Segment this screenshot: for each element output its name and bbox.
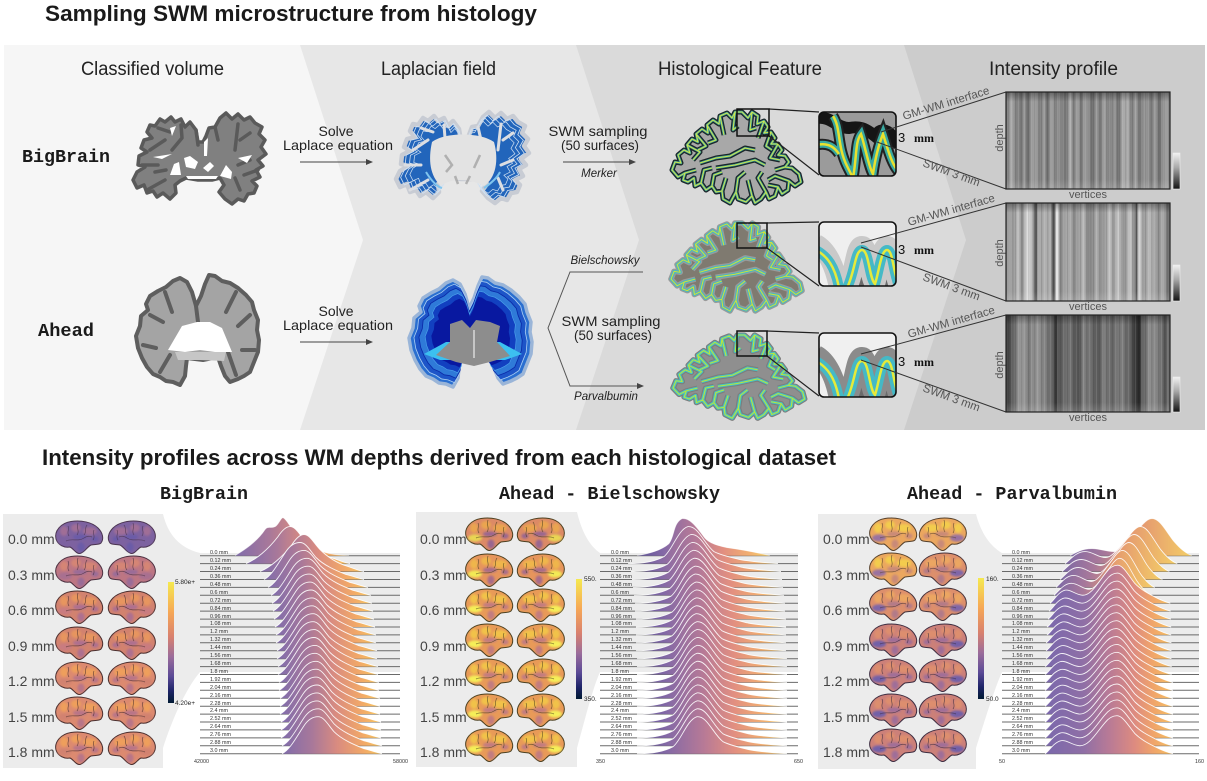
inset zoom: BigBrain <box>737 109 899 178</box>
ridge row labels: 0.12 mm <box>1012 558 1033 564</box>
ridge row labels: 1.2 mm <box>611 629 629 635</box>
ridge row labels: 1.56 mm <box>210 653 231 659</box>
ridge row labels: 1.56 mm <box>1012 653 1033 659</box>
depth labels: 0.9 mm <box>8 638 55 654</box>
label: SWM 3 mm 1: SWM 3 mm <box>921 158 981 189</box>
ridge row labels: 0.0 mm <box>611 550 629 556</box>
stage band: classified volume <box>4 45 1205 430</box>
label: 3 mm (bottom) <box>898 354 934 369</box>
depth labels <box>420 531 467 760</box>
cortical surface maps <box>466 518 564 762</box>
ridge row labels: 0.24 mm <box>1012 566 1033 572</box>
ridge row labels: 3.0 mm <box>210 748 228 754</box>
label: 3 mm (top): 3 <box>898 130 905 145</box>
ridge row labels: 2.64 mm <box>611 724 632 730</box>
panel: sampling workflow <box>4 45 1205 430</box>
label: 3 mm (top): mm <box>914 131 934 145</box>
intensity profile: Bielschowsky <box>1006 203 1170 301</box>
label: GM-WM interface 1: GM-WM interface <box>901 85 991 123</box>
label: solve laplace (top): Solve <box>318 123 354 139</box>
ridge row labels: 0.72 mm <box>210 598 231 604</box>
inset zoom: Bielschowsky <box>737 222 899 288</box>
label: SWM 3 mm 3: SWM 3 mm <box>921 383 981 414</box>
x axis labels: 58000 <box>393 759 408 765</box>
arrows: branching to Bielschowsky and Parvalbumin <box>548 272 643 386</box>
label: SWM sampling top <box>548 123 648 153</box>
axis label: depth 1: depth <box>994 124 1006 152</box>
ridge row labels: 1.68 mm <box>210 661 231 667</box>
ridge row labels: 2.64 mm <box>210 724 231 730</box>
ridge row labels: 0.12 mm <box>210 558 231 564</box>
ridge row labels: 1.56 mm <box>611 653 632 659</box>
ridge row labels: 0.36 mm <box>1012 574 1033 580</box>
depth labels <box>8 531 55 760</box>
ridge row labels: 1.32 mm <box>611 637 632 643</box>
axis label: vertices 2: vertices <box>1069 301 1107 313</box>
grey backdrop <box>818 514 1199 769</box>
ridge row labels: 1.08 mm <box>210 621 231 627</box>
depth labels: 1.5 mm <box>8 709 55 725</box>
colorbar: 50.0 <box>986 696 999 703</box>
depth labels <box>823 531 870 760</box>
label: solve laplace (bottom): Laplace equation <box>283 317 393 333</box>
depth labels: 0.3 mm <box>823 567 870 583</box>
colorbar: 350. <box>584 696 597 703</box>
x axis labels: 160 <box>1195 759 1204 765</box>
label: Bielschowsky: Bielschowsky <box>570 255 641 267</box>
ridge row labels: 1.92 mm <box>210 677 231 683</box>
ridge row labels <box>210 550 231 754</box>
histology brain: Bielschowsky <box>671 223 802 311</box>
depth labels: 1.5 mm <box>823 709 870 725</box>
label: 3 mm (bottom): mm <box>914 355 934 369</box>
connector lines: profile 1 <box>877 92 1006 189</box>
panel: BigBrain depth profiles <box>3 484 408 768</box>
ridge row labels: 1.2 mm <box>1012 629 1030 635</box>
connector lines: profile 2 <box>861 203 1006 301</box>
ridge row labels: 0.24 mm <box>210 566 231 572</box>
label: 3 mm (middle): mm <box>914 243 934 257</box>
depth labels: 0.6 mm <box>823 602 870 618</box>
label: Parvalbumin: Parvalbumin <box>574 391 638 403</box>
ridge row labels: 0.24 mm <box>611 566 632 572</box>
heading: classified volume: Classified volume <box>81 59 224 80</box>
label: SWM sampling top: SWM sampling <box>548 123 648 139</box>
ridge row labels: 2.28 mm <box>1012 701 1033 707</box>
ridge row labels: 2.4 mm <box>611 708 629 714</box>
ridge row labels: 0.48 mm <box>1012 582 1033 588</box>
ridge row labels: 0.0 mm <box>1012 550 1030 556</box>
depth labels: 0.0 mm <box>420 531 467 547</box>
stage band: histological feature <box>576 45 1205 430</box>
ridge row labels: 1.44 mm <box>611 645 632 651</box>
ridge row labels: 1.8 mm <box>210 669 228 675</box>
intensity profile: Parvalbumin <box>1006 315 1170 412</box>
row label: BigBrain: BigBrain <box>22 147 110 168</box>
ridge row labels: 2.52 mm <box>1012 716 1033 722</box>
ridge row labels: 2.88 mm <box>611 740 632 746</box>
depth labels: 0.3 mm <box>8 567 55 583</box>
ridge row labels: 0.48 mm <box>611 582 632 588</box>
x axis labels <box>194 759 408 765</box>
label: 3 mm (top) <box>898 130 934 145</box>
ridge row labels: 2.16 mm <box>210 693 231 699</box>
ridge row labels: 2.52 mm <box>611 716 632 722</box>
stage band: laplacian field <box>300 45 1205 430</box>
label: solve laplace (bottom): Solve <box>318 303 354 319</box>
ridge row labels: 2.04 mm <box>1012 685 1033 691</box>
ridge row labels <box>1012 550 1033 754</box>
section title: Intensity profiles across WM depths derived from each histological dataset <box>42 445 837 470</box>
ridge row labels: 0.84 mm <box>611 606 632 612</box>
depth labels: 0.9 mm <box>823 638 870 654</box>
ridge row labels: 1.92 mm <box>1012 677 1033 683</box>
axis label: vertices 1: vertices <box>1069 189 1107 201</box>
colorbar: 550. <box>584 576 597 583</box>
ridge plot <box>600 519 798 754</box>
ridge row labels: 0.84 mm <box>1012 606 1033 612</box>
histology brain: Parvalbumin <box>673 335 805 418</box>
label: GM-WM interface 3: GM-WM interface <box>907 305 996 341</box>
axis label: depth 3: depth <box>994 351 1006 379</box>
main title: Sampling SWM microstructure from histology <box>45 1 538 26</box>
depth labels: 0.3 mm <box>420 567 467 583</box>
brain: Ahead laplacian field <box>409 277 532 387</box>
axis label: depth 2: depth <box>994 239 1006 267</box>
brain: BigBrain classified volume <box>133 113 266 204</box>
ridge row labels: 1.08 mm <box>1012 621 1033 627</box>
brain: BigBrain laplacian field <box>396 112 529 203</box>
connector lines: profile 3 <box>861 315 1006 412</box>
depth labels: 1.8 mm <box>823 744 870 760</box>
ridge row labels: 0.6 mm <box>611 590 629 596</box>
ridge row labels: 1.32 mm <box>210 637 231 643</box>
depth labels: 0.6 mm <box>420 602 467 618</box>
brain: Ahead classified volume <box>136 275 259 385</box>
ridge row labels: 0.96 mm <box>210 614 231 620</box>
arrow: SWM sampling top <box>563 161 635 163</box>
ridge row labels: 0.96 mm <box>611 614 632 620</box>
ridge row labels: 0.6 mm <box>210 590 228 596</box>
ridge row labels: 2.04 mm <box>611 685 632 691</box>
arrow: solve (top) <box>300 161 372 163</box>
x axis labels: 350 <box>596 759 605 765</box>
ridge row labels: 0.0 mm <box>210 550 228 556</box>
ridge row labels: 1.92 mm <box>611 677 632 683</box>
ridge row labels: 2.28 mm <box>611 701 632 707</box>
ridge row labels: 0.72 mm <box>1012 598 1033 604</box>
grey backdrop <box>3 514 400 768</box>
colorbar: profile 1 <box>1173 153 1180 189</box>
colorbar <box>168 579 195 707</box>
ridge row labels: 0.72 mm <box>611 598 632 604</box>
depth labels: 0.0 mm <box>823 531 870 547</box>
ridge row labels: 3.0 mm <box>611 748 629 754</box>
depth labels: 1.8 mm <box>8 744 55 760</box>
colorbar <box>978 576 999 703</box>
cortical surface maps <box>870 518 966 762</box>
x axis labels: 42000 <box>194 759 209 765</box>
colorbar: profile 3 <box>1173 377 1180 412</box>
panel: Ahead Bielschowsky depth profiles <box>416 484 803 767</box>
depth labels: 0.0 mm <box>8 531 55 547</box>
ridge row labels: 2.88 mm <box>210 740 231 746</box>
colorbar: profile 2 <box>1173 265 1180 301</box>
ridge plot <box>1002 519 1199 754</box>
depth labels: 1.8 mm <box>420 744 467 760</box>
ridge row labels: 0.96 mm <box>1012 614 1033 620</box>
ridge row labels: 2.04 mm <box>210 685 231 691</box>
panel: Ahead Parvalbumin depth profiles <box>818 484 1204 769</box>
colorbar: 160. <box>986 576 999 583</box>
ridge row labels: 2.76 mm <box>611 732 632 738</box>
inset zoom: Parvalbumin <box>737 331 899 399</box>
row label: Ahead: Ahead <box>38 321 94 342</box>
label: 3 mm (middle): 3 <box>898 242 905 257</box>
ridge row labels: 1.44 mm <box>1012 645 1033 651</box>
ridge plot <box>200 518 400 754</box>
depth labels: 1.5 mm <box>420 709 467 725</box>
grey backdrop <box>416 512 798 767</box>
ridge row labels: 1.68 mm <box>611 661 632 667</box>
ridge row labels: 2.88 mm <box>1012 740 1033 746</box>
depth labels: 1.2 mm <box>8 673 55 689</box>
cortical surface maps <box>56 521 155 765</box>
ridge row labels: 2.52 mm <box>210 716 231 722</box>
label: Merker: Merker <box>581 168 618 180</box>
ridge row labels: 1.68 mm <box>1012 661 1033 667</box>
ridge row labels: 0.36 mm <box>210 574 231 580</box>
x axis labels: 50 <box>999 759 1005 765</box>
label: SWM sampling top: (50 surfaces) <box>561 137 639 153</box>
ridge row labels: 1.44 mm <box>210 645 231 651</box>
heading: BigBrain: BigBrain <box>160 484 248 505</box>
ridge row labels: 0.48 mm <box>210 582 231 588</box>
depth labels: 1.2 mm <box>823 673 870 689</box>
ridge row labels: 0.36 mm <box>611 574 632 580</box>
label: 3 mm (bottom): 3 <box>898 354 905 369</box>
x axis labels: 650 <box>794 759 803 765</box>
depth labels: 0.9 mm <box>420 638 467 654</box>
depth labels: 0.6 mm <box>8 602 55 618</box>
ridge row labels: 0.84 mm <box>210 606 231 612</box>
histology brain: BigBrain Merker <box>672 112 801 203</box>
label: solve laplace (top) <box>283 123 393 153</box>
x axis labels <box>596 759 803 765</box>
label: SWM sampling bottom: (50 surfaces) <box>574 327 652 343</box>
heading: Ahead - Parvalbumin: Ahead - Parvalbumin <box>907 484 1117 505</box>
ridge row labels: 0.6 mm <box>1012 590 1030 596</box>
ridge row labels: 2.76 mm <box>210 732 231 738</box>
x axis labels <box>999 759 1204 765</box>
colorbar: 4.20e+ <box>175 700 195 707</box>
ridge row labels: 1.32 mm <box>1012 637 1033 643</box>
ridge row labels: 2.4 mm <box>210 708 228 714</box>
label: solve laplace (top): Laplace equation <box>283 137 393 153</box>
ridge row labels: 2.16 mm <box>611 693 632 699</box>
ridge row labels: 1.8 mm <box>611 669 629 675</box>
heading: histological feature: Histological Feature <box>658 59 822 80</box>
heading: laplacian field: Laplacian field <box>381 59 496 80</box>
label: solve laplace (bottom) <box>283 303 393 333</box>
label: SWM 3 mm 2: SWM 3 mm <box>921 272 981 303</box>
label: GM-WM interface 2: GM-WM interface <box>907 193 996 229</box>
ridge row labels: 2.76 mm <box>1012 732 1033 738</box>
stage band: intensity profile <box>904 45 1205 430</box>
label: SWM sampling bottom <box>562 313 660 343</box>
ridge row labels: 0.12 mm <box>611 558 632 564</box>
ridge row labels: 2.4 mm <box>1012 708 1030 714</box>
ridge row labels <box>611 550 632 754</box>
ridge row labels: 2.16 mm <box>1012 693 1033 699</box>
axis label: vertices 3: vertices <box>1069 412 1107 424</box>
depth labels: 1.2 mm <box>420 673 467 689</box>
heading: intensity profile: Intensity profile <box>989 59 1118 80</box>
colorbar: 5.80e+ <box>175 579 195 586</box>
ridge row labels: 3.0 mm <box>1012 748 1030 754</box>
label: SWM sampling bottom: SWM sampling <box>562 313 660 329</box>
ridge row labels: 2.64 mm <box>1012 724 1033 730</box>
ridge row labels: 1.2 mm <box>210 629 228 635</box>
intensity profile: BigBrain <box>1006 92 1170 189</box>
ridge row labels: 1.8 mm <box>1012 669 1030 675</box>
arrow: solve (bottom) <box>300 341 372 343</box>
label: 3 mm (middle) <box>898 242 934 257</box>
heading: Ahead - Bielschowsky: Ahead - Bielschowsky <box>499 484 720 505</box>
colorbar <box>576 576 597 703</box>
ridge row labels: 1.08 mm <box>611 621 632 627</box>
ridge row labels: 2.28 mm <box>210 701 231 707</box>
